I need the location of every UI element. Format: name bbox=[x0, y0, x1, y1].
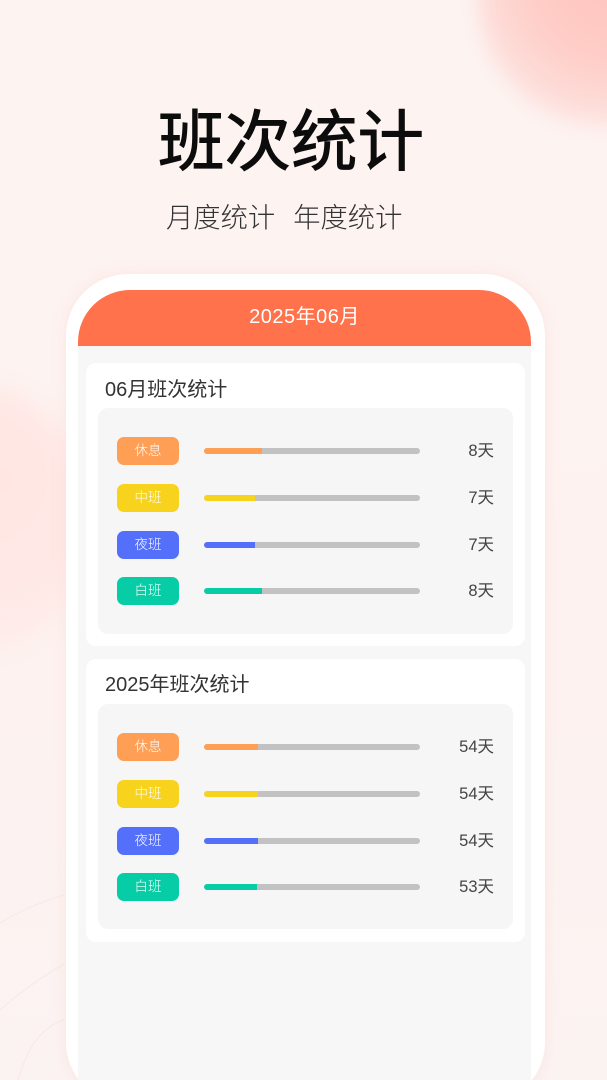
phone frame bbox=[66, 274, 545, 1080]
subtitle: 月度统计 年度统计 bbox=[166, 202, 402, 233]
row: yearly night shift: 夜班 bbox=[134, 833, 162, 848]
row: day shift: 白班 bbox=[134, 583, 162, 598]
row: yearly middle shift: 中班 bbox=[134, 786, 162, 801]
row: day shift: 8天 bbox=[468, 582, 494, 600]
row: yearly rest bbox=[117, 733, 494, 761]
panel: monthly list bbox=[98, 408, 513, 634]
row: night shift bbox=[117, 531, 494, 559]
row: night shift: 夜班 bbox=[134, 537, 162, 552]
row: rest bbox=[117, 437, 494, 465]
row: yearly day shift: 白班 bbox=[134, 879, 162, 894]
row: yearly night shift bbox=[117, 827, 494, 855]
row: day shift bbox=[117, 577, 494, 605]
row: middle shift: 7天 bbox=[468, 489, 494, 507]
heading: yearly stats: 2025年班次统计 bbox=[105, 674, 250, 696]
panel: yearly stats bbox=[86, 659, 525, 942]
row: yearly middle shift bbox=[117, 780, 494, 808]
panel: monthly stats bbox=[86, 363, 525, 646]
row: yearly day shift bbox=[117, 873, 494, 901]
row: yearly middle shift: 54天 bbox=[459, 785, 494, 803]
row: yearly rest: 休息 bbox=[134, 739, 162, 754]
row: yearly night shift: 54天 bbox=[459, 832, 494, 850]
header bar bbox=[78, 290, 531, 346]
row: yearly rest: 54天 bbox=[459, 738, 494, 756]
row: yearly day shift: 53天 bbox=[459, 878, 494, 896]
title: 班次统计 bbox=[158, 106, 424, 180]
phone screen bbox=[78, 290, 531, 1080]
header bar: 2025年06月 bbox=[249, 306, 360, 328]
heading: monthly stats: 06月班次统计 bbox=[105, 379, 227, 401]
row: night shift: 7天 bbox=[468, 536, 494, 554]
row: middle shift bbox=[117, 484, 494, 512]
row: rest: 8天 bbox=[468, 442, 494, 460]
panel: yearly list bbox=[98, 704, 513, 929]
row: rest: 休息 bbox=[134, 443, 162, 458]
row: middle shift: 中班 bbox=[134, 490, 162, 505]
